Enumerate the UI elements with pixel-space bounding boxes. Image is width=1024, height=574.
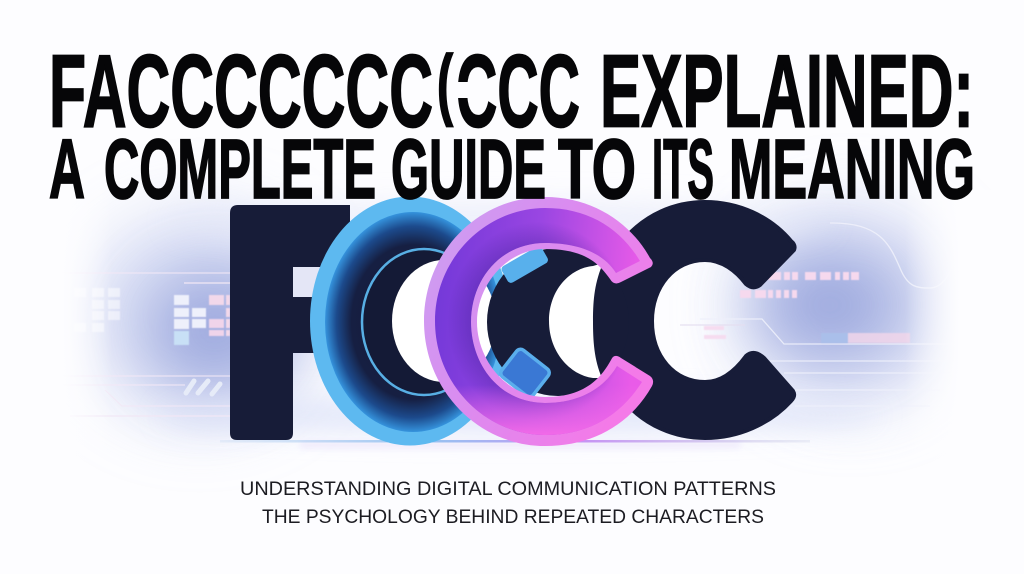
title line 1: (	[437, 38, 453, 127]
icon: lower blue tab	[499, 347, 551, 399]
title line 1: CCC	[456, 34, 580, 148]
title	[49, 34, 975, 216]
icon: upper blue tab	[500, 245, 549, 284]
left slashes	[186, 381, 220, 394]
title line 2: ITS	[652, 122, 714, 216]
side fades	[0, 190, 62, 460]
inner dark C with white hole	[487, 248, 629, 396]
right pixel tiles	[704, 272, 910, 343]
subtitle	[240, 478, 776, 528]
floor glow line	[220, 440, 810, 442]
title line 2: A	[49, 122, 85, 216]
title line 2: TO	[558, 122, 636, 216]
title line 2: GUIDE	[391, 122, 546, 216]
subtitle: UNDERSTANDING DIGITAL COMMUNICATION PATTERNS	[240, 478, 776, 500]
letter O: blue ring	[310, 196, 510, 446]
panel: blurred tech background	[0, 190, 1024, 460]
right circuit lines	[680, 223, 960, 406]
left pixel tiles	[74, 288, 230, 345]
title line 2: COMPLETE	[104, 122, 376, 216]
title line 2	[49, 122, 975, 216]
left circuit lines	[62, 273, 230, 416]
subtitle: THE PSYCHOLOGY BEHIND REPEATED CHARACTERS	[262, 506, 764, 528]
letter C: purple gradient	[424, 197, 653, 446]
letter C: dark right with hole	[595, 202, 795, 438]
letter F	[230, 205, 350, 440]
title line 1: FACCCCCCC	[49, 34, 433, 148]
